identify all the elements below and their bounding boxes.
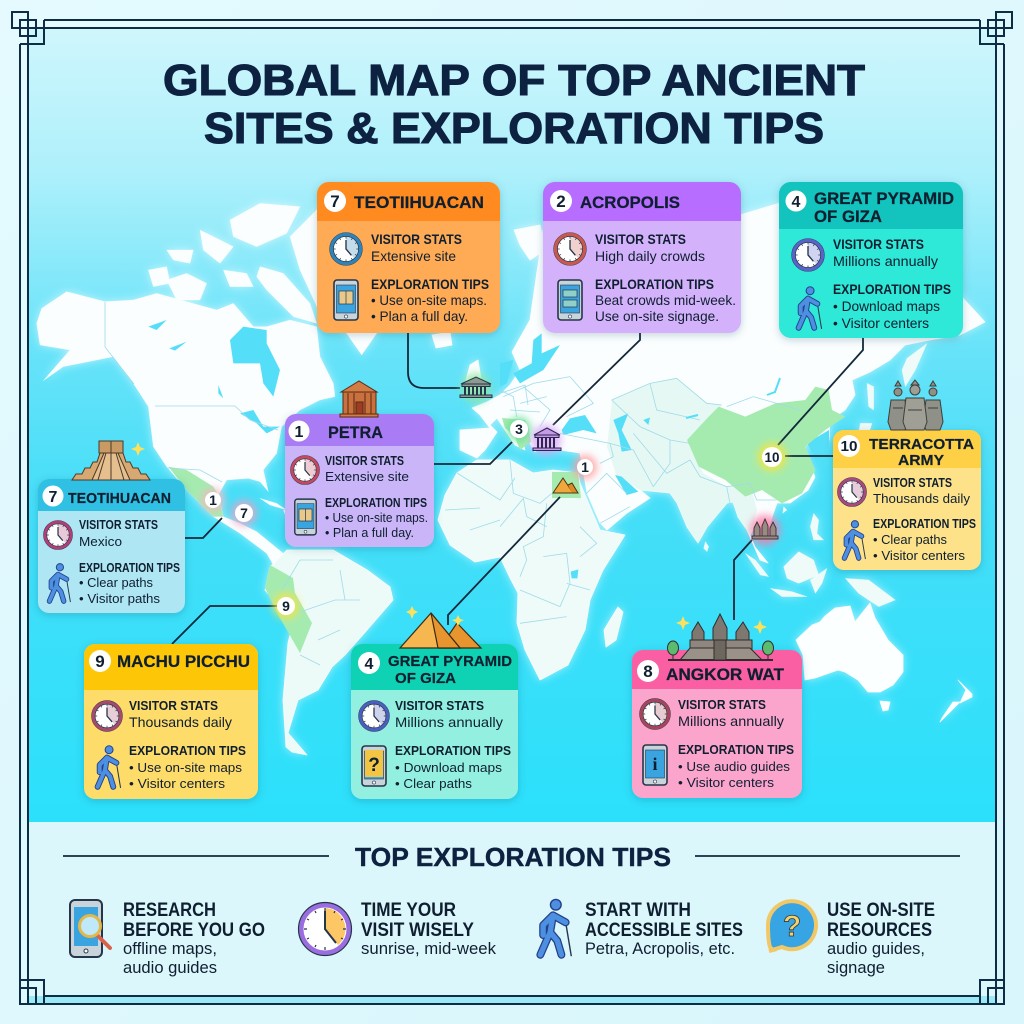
mini icon: temple in Europe bbox=[460, 377, 492, 398]
visitor stats bbox=[833, 236, 938, 269]
number badge: 4 bbox=[365, 656, 374, 673]
tip: time your visit wisely: TIME YOUR bbox=[361, 900, 456, 921]
map marker 3: 3 bbox=[515, 421, 523, 437]
tip: time your visit wisely bbox=[298, 900, 496, 958]
icon: phone and magnifier bbox=[70, 900, 110, 957]
exploration tips: • Visitor centers bbox=[129, 776, 226, 791]
number badge: 7 bbox=[49, 489, 58, 506]
icon: clock bbox=[640, 699, 670, 729]
exploration tips bbox=[79, 560, 180, 606]
number badge bbox=[838, 435, 860, 457]
card heading: TEOTIIHUACAN bbox=[354, 193, 484, 212]
icon: question bubble: ? bbox=[783, 910, 801, 943]
section: top exploration tips bbox=[63, 842, 960, 977]
land masses bbox=[37, 200, 985, 755]
exploration tips: • Clear paths bbox=[395, 776, 473, 791]
exploration tips: • Visitor paths bbox=[79, 591, 161, 606]
Black Sea bbox=[562, 415, 597, 435]
North America bbox=[37, 200, 387, 565]
visitor stats: VISITOR STATS bbox=[678, 697, 766, 712]
monument: stepped pyramid bbox=[72, 441, 150, 480]
visitor stats bbox=[79, 517, 158, 549]
Australia bbox=[796, 603, 903, 692]
icon: clock bbox=[92, 701, 122, 731]
number badge: 8 bbox=[643, 662, 653, 681]
icon: hiker bbox=[49, 564, 70, 602]
map marker 1 Mexico bbox=[205, 492, 221, 508]
icon: clock bbox=[44, 521, 72, 549]
visitor stats bbox=[395, 698, 503, 730]
title: GLOBAL MAP OF TOP ANCIENT bbox=[163, 56, 865, 105]
icon: question bubble bbox=[768, 901, 816, 951]
tip: research before you go: audio guides bbox=[123, 958, 217, 977]
card heading: PETRA bbox=[328, 423, 383, 442]
monument: Petra treasury bbox=[340, 381, 378, 417]
icon: phone with map bbox=[295, 499, 316, 535]
map marker 10 bbox=[762, 447, 782, 467]
card heading: OF GIZA bbox=[395, 670, 456, 687]
icon: hiker bbox=[540, 899, 571, 956]
number badge bbox=[288, 420, 310, 442]
exploration tips: • Visitor centers bbox=[873, 548, 966, 563]
visitor stats: Millions annually bbox=[678, 713, 784, 729]
card: Acropolis purple bbox=[543, 182, 741, 333]
exploration tips: EXPLORATION TIPS bbox=[371, 276, 489, 292]
number badge: 1 bbox=[295, 424, 304, 441]
number badge: 4 bbox=[792, 194, 801, 211]
Aral bbox=[643, 417, 650, 425]
number badge: 2 bbox=[556, 192, 566, 211]
card heading: OF GIZA bbox=[814, 207, 882, 226]
world map bbox=[37, 200, 985, 755]
card heading: ARMY bbox=[898, 452, 944, 469]
map marker 1 Levant: 1 bbox=[581, 459, 589, 475]
visitor stats bbox=[595, 231, 705, 264]
exploration tips: EXPLORATION TIPS bbox=[79, 560, 180, 575]
number badge: 9 bbox=[95, 652, 105, 671]
number badge bbox=[637, 660, 659, 682]
icon: phone with signage bbox=[558, 280, 582, 320]
Britain bbox=[466, 360, 482, 392]
icon: clock bbox=[554, 233, 586, 265]
visitor stats: Millions annually bbox=[395, 714, 503, 730]
tip: start with accessible sites: ACCESSIBLE SITES bbox=[585, 920, 743, 941]
visitor stats: VISITOR STATS bbox=[371, 231, 462, 247]
number badge bbox=[42, 486, 64, 506]
Svalbard and Arctic islands bbox=[514, 225, 545, 260]
exploration tips: Beat crowds mid-week. bbox=[595, 292, 736, 308]
New Zealand bbox=[940, 680, 972, 722]
exploration tips: EXPLORATION TIPS bbox=[678, 742, 794, 757]
visitor stats bbox=[873, 475, 971, 506]
map marker 9: 9 bbox=[282, 598, 290, 614]
exploration tips: • Clear paths bbox=[79, 575, 153, 590]
map marker 7 bbox=[235, 504, 253, 522]
card heading: GREAT PYRAMID bbox=[814, 189, 954, 208]
ocean map background bbox=[28, 28, 996, 824]
card heading: ACROPOLIS bbox=[580, 193, 680, 212]
icon: clock bbox=[838, 478, 866, 506]
visitor stats: Thousands daily bbox=[129, 714, 232, 730]
number badge bbox=[324, 190, 346, 212]
exploration tips: Use on-site signage. bbox=[595, 308, 719, 324]
icon: phone with map bbox=[334, 280, 358, 320]
Italy bbox=[502, 418, 531, 450]
highlighted countries bbox=[168, 387, 845, 653]
Baltic bbox=[513, 333, 560, 383]
exploration tips: EXPLORATION TIPS bbox=[325, 495, 427, 510]
icon: phone with question mark: ? bbox=[368, 755, 380, 776]
icon: hiker bbox=[799, 287, 822, 329]
map marker glows bbox=[201, 373, 786, 619]
card: Great Pyramid teal top bbox=[779, 182, 963, 338]
exploration tips bbox=[325, 495, 428, 540]
exploration tips: • Plan a full day. bbox=[325, 525, 414, 540]
visitor stats: Mexico bbox=[79, 534, 122, 549]
Lake Victoria bbox=[571, 569, 578, 578]
visitor stats: VISITOR STATS bbox=[595, 231, 686, 247]
card: Petra bbox=[285, 414, 434, 547]
tip: research before you go: offline maps, bbox=[123, 939, 217, 958]
exploration tips: • Use on-site maps bbox=[129, 760, 243, 775]
visitor stats: VISITOR STATS bbox=[833, 236, 924, 252]
South America bbox=[265, 550, 393, 755]
mini icon: angkor bbox=[752, 519, 778, 539]
number badge: 10 bbox=[840, 438, 858, 455]
visitor stats: Extensive site bbox=[371, 248, 456, 264]
Egypt bbox=[552, 472, 581, 498]
tip: research before you go: RESEARCH bbox=[123, 900, 216, 921]
exploration tips: • Visitor centers bbox=[833, 315, 929, 331]
visitor stats bbox=[678, 697, 784, 729]
title: SITES & EXPLORATION TIPS bbox=[204, 104, 824, 153]
tip: research before you go bbox=[70, 900, 265, 977]
exploration tips: • Plan a full day. bbox=[371, 308, 468, 324]
exploration tips bbox=[833, 281, 951, 331]
exploration tips bbox=[873, 516, 976, 563]
visitor stats bbox=[325, 453, 409, 484]
visitor stats bbox=[129, 698, 232, 730]
visitor stats: VISITOR STATS bbox=[129, 698, 218, 713]
exploration tips: EXPLORATION TIPS bbox=[833, 281, 951, 297]
visitor stats: Extensive site bbox=[325, 469, 409, 484]
exploration tips: • Use on-site maps. bbox=[325, 510, 428, 525]
card heading: ANGKOR WAT bbox=[666, 665, 785, 684]
card heading: GREAT PYRAMID bbox=[388, 653, 512, 670]
tip: start with accessible sites: Petra, Acropolis, etc. bbox=[585, 939, 735, 958]
tip: use on-site resources: USE ON-SITE bbox=[827, 900, 935, 921]
visitor stats: High daily crowds bbox=[595, 248, 705, 264]
tip: use on-site resources: audio guides, bbox=[827, 939, 925, 958]
monument: terracotta warriors bbox=[888, 380, 943, 430]
card: Terracotta Army bbox=[833, 430, 981, 570]
icon: phone with question mark bbox=[362, 746, 386, 786]
Peru bbox=[265, 565, 312, 653]
Persian Gulf bbox=[615, 475, 638, 495]
monument: Angkor Wat bbox=[668, 614, 774, 660]
tip: research before you go: BEFORE YOU GO bbox=[123, 920, 265, 941]
tip: time your visit wisely: sunrise, mid-week bbox=[361, 939, 496, 958]
visitor stats bbox=[371, 231, 462, 264]
icon: clock bbox=[359, 701, 389, 731]
exploration tips: EXPLORATION TIPS bbox=[873, 516, 976, 531]
tip: time your visit wisely: VISIT WISELY bbox=[361, 920, 474, 941]
mini icon: acropolis bbox=[533, 428, 561, 450]
exploration tips: • Download maps bbox=[833, 298, 940, 314]
icon: clock bbox=[298, 902, 352, 956]
Iceland bbox=[432, 332, 452, 348]
map marker 9 bbox=[277, 597, 295, 615]
exploration tips: • Use audio guides bbox=[678, 759, 791, 774]
monument star bbox=[131, 442, 145, 456]
visitor stats: Millions annually bbox=[833, 253, 938, 269]
card heading: MACHU PICCHU bbox=[117, 652, 250, 671]
exploration tips: EXPLORATION TIPS bbox=[595, 276, 714, 292]
number badge bbox=[89, 650, 111, 672]
card heading bbox=[814, 189, 954, 226]
icon: clock bbox=[792, 239, 824, 271]
Central and South Asia tint bbox=[607, 378, 757, 543]
exploration tips bbox=[678, 742, 794, 790]
Tasmania bbox=[880, 701, 890, 711]
card: Teotihuacan left blue bbox=[38, 479, 185, 613]
Madagascar bbox=[604, 607, 623, 647]
icon: hiker bbox=[844, 521, 865, 559]
tip: start with accessible sites bbox=[540, 899, 743, 958]
seas and lakes bbox=[148, 320, 829, 578]
exploration tips: • Clear paths bbox=[873, 532, 947, 547]
mini icon: pyramid bbox=[553, 478, 578, 493]
exploration tips: • Use on-site maps. bbox=[371, 292, 487, 308]
map marker 3 bbox=[510, 420, 528, 438]
card heading bbox=[388, 653, 512, 687]
exploration tips: EXPLORATION TIPS bbox=[129, 743, 246, 758]
Lake Baikal and Balkhash bbox=[686, 378, 780, 418]
Mexico bbox=[168, 467, 223, 517]
map marker 1 Mexico: 1 bbox=[209, 492, 217, 508]
visitor stats: VISITOR STATS bbox=[79, 517, 158, 532]
exploration tips bbox=[395, 743, 511, 791]
icon: clock bbox=[330, 233, 362, 265]
Africa bbox=[438, 460, 625, 680]
number badge bbox=[358, 652, 380, 674]
exploration tips bbox=[595, 276, 736, 324]
card: Teotihuacan orange bbox=[317, 182, 500, 333]
Eurasia bbox=[460, 200, 985, 563]
card: Great Pyramid bottom bbox=[351, 644, 518, 799]
map marker 7: 7 bbox=[240, 505, 248, 521]
monument: pyramids of Giza bbox=[400, 606, 481, 648]
Asia islands bbox=[704, 343, 927, 607]
visitor stats: VISITOR STATS bbox=[873, 475, 952, 490]
China bbox=[687, 387, 845, 503]
tip: use on-site resources: signage bbox=[827, 958, 885, 977]
number badge bbox=[550, 190, 572, 212]
number badge bbox=[786, 190, 806, 212]
tip: start with accessible sites: START WITH bbox=[585, 900, 691, 921]
card heading: TERRACOTTA bbox=[869, 436, 974, 453]
bottom panel background bbox=[28, 822, 996, 998]
icon: hiker bbox=[98, 746, 121, 788]
section heading: TOP EXPLORATION TIPS bbox=[355, 842, 671, 872]
visitor stats: Thousands daily bbox=[873, 491, 971, 506]
number badge: 7 bbox=[330, 192, 340, 211]
lower frame band bbox=[28, 996, 996, 1004]
exploration tips bbox=[129, 743, 246, 791]
connector lines bbox=[172, 333, 863, 644]
exploration tips bbox=[371, 276, 489, 324]
card: Machu Picchu bbox=[84, 644, 258, 799]
icon: clock bbox=[291, 456, 319, 484]
card heading bbox=[869, 436, 974, 469]
North Sea bbox=[500, 360, 513, 387]
exploration tips: • Download maps bbox=[395, 760, 503, 775]
map marker 10: 10 bbox=[764, 449, 780, 465]
Caspian bbox=[613, 413, 632, 452]
title bbox=[163, 56, 865, 153]
exploration tips: EXPLORATION TIPS bbox=[395, 743, 511, 758]
icon: phone with info: i bbox=[652, 754, 658, 774]
tip: use on-site resources: RESOURCES bbox=[827, 920, 932, 941]
exploration tips: • Visitor centers bbox=[678, 775, 775, 790]
Yellow sea bbox=[807, 430, 829, 452]
visitor stats: VISITOR STATS bbox=[395, 698, 484, 713]
country borders bbox=[105, 302, 800, 665]
visitor stats: VISITOR STATS bbox=[325, 453, 404, 468]
map marker 1 Levant bbox=[577, 459, 593, 475]
card heading: TEOTIHUACAN bbox=[68, 490, 171, 507]
icon: phone with info bbox=[643, 745, 667, 785]
tip: use on-site resources bbox=[768, 900, 935, 977]
card: Angkor Wat bbox=[632, 650, 802, 798]
